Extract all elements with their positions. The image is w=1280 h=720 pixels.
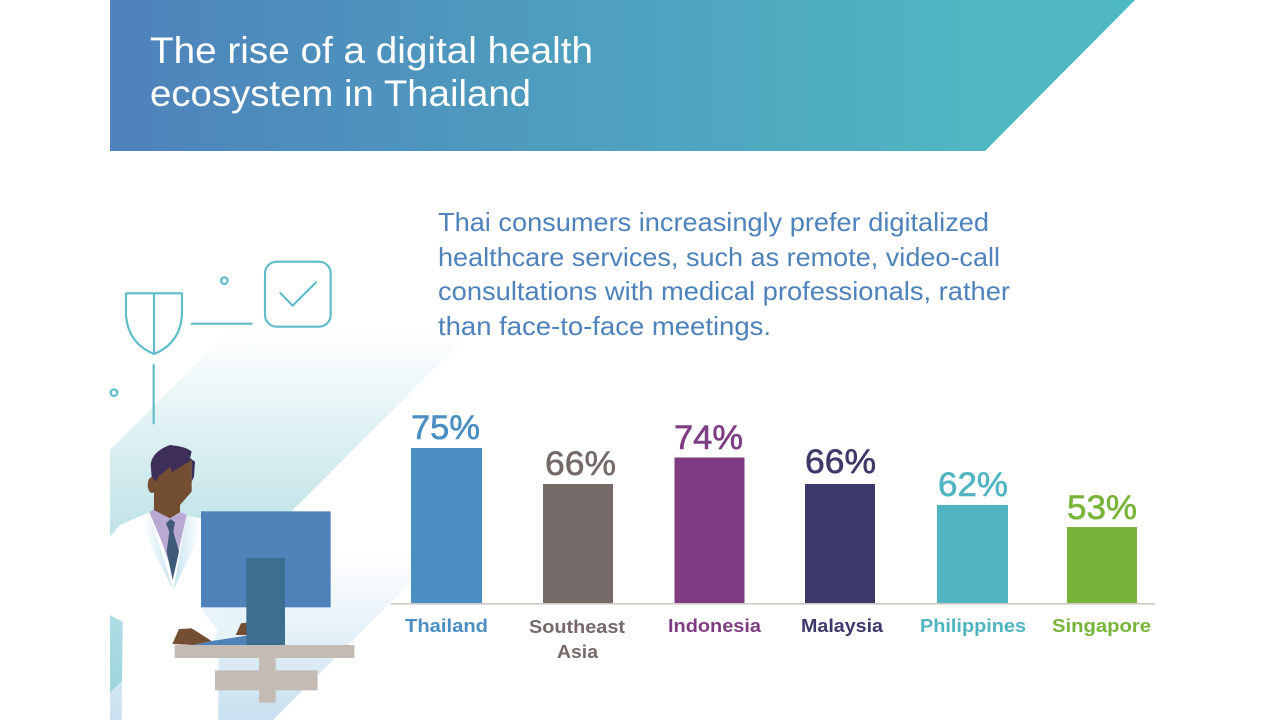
bar: Thailand 75%: 75% xyxy=(411,409,480,447)
bar: Southeast Asia 66%: Asia xyxy=(557,641,599,662)
monitor stand xyxy=(246,558,285,645)
bar: Southeast Asia 66%: Southeast xyxy=(529,616,625,637)
icon: shield xyxy=(126,293,182,354)
bar: Singapore 53% xyxy=(1052,489,1151,636)
bar: Malaysia 66%: 66% xyxy=(805,443,876,481)
illustration: doctor at computer xyxy=(110,445,354,720)
title: The rise of a digital health xyxy=(150,30,593,71)
left lapel xyxy=(143,512,173,590)
icon: check box xyxy=(265,262,331,327)
right sleeve xyxy=(213,608,247,642)
bar: Indonesia 74%: 74% xyxy=(674,419,743,457)
bar: Malaysia 66% xyxy=(801,443,884,636)
icon: small circle top xyxy=(221,277,228,284)
neck and face xyxy=(154,458,192,518)
bar: Malaysia 66%: Malaysia xyxy=(801,615,884,636)
bar chart xyxy=(391,409,1155,662)
title: ecosystem in Thailand xyxy=(150,73,531,114)
desk xyxy=(175,645,354,703)
intro text: Thai consumers increasingly prefer digitalized xyxy=(438,207,989,237)
intro text: healthcare services, such as remote, video-call xyxy=(438,242,1000,272)
bar: Indonesia 74%: Indonesia xyxy=(668,615,762,636)
bar: Indonesia 74% xyxy=(668,419,762,636)
bar: Philippines 62% xyxy=(920,466,1026,636)
bar: Singapore 53%: Singapore xyxy=(1052,615,1151,636)
hair xyxy=(151,445,195,482)
connector line vertical xyxy=(150,365,157,423)
connector line horizontal xyxy=(192,320,252,327)
bar: Philippines 62%: Philippines xyxy=(920,615,1026,636)
bar: Southeast Asia 66%: 66% xyxy=(545,445,616,483)
header banner xyxy=(110,0,1135,151)
axis line xyxy=(391,603,1155,605)
monitor xyxy=(201,511,331,607)
ear xyxy=(148,477,156,493)
tie xyxy=(166,519,179,580)
right lapel xyxy=(173,515,200,590)
intro text: than face-to-face meetings. xyxy=(438,311,771,341)
intro text: consultations with medical professionals, rather xyxy=(438,276,1010,306)
illustration: security icons xyxy=(111,262,331,423)
shirt xyxy=(149,509,187,575)
bar: Thailand 75% xyxy=(405,409,488,636)
keyboard xyxy=(193,636,247,645)
illustration: background diagonal bands xyxy=(110,320,490,720)
title xyxy=(150,30,593,114)
bar: Philippines 62%: 62% xyxy=(938,466,1008,504)
bar: Thailand 75%: Thailand xyxy=(405,615,488,636)
bar: Southeast Asia 66% xyxy=(529,445,625,662)
left hand xyxy=(172,628,212,645)
doctor coat xyxy=(110,512,218,720)
intro text xyxy=(438,207,1010,341)
icon: small circle left xyxy=(111,389,117,396)
right hand xyxy=(236,623,247,635)
bar: Singapore 53%: 53% xyxy=(1067,489,1137,527)
